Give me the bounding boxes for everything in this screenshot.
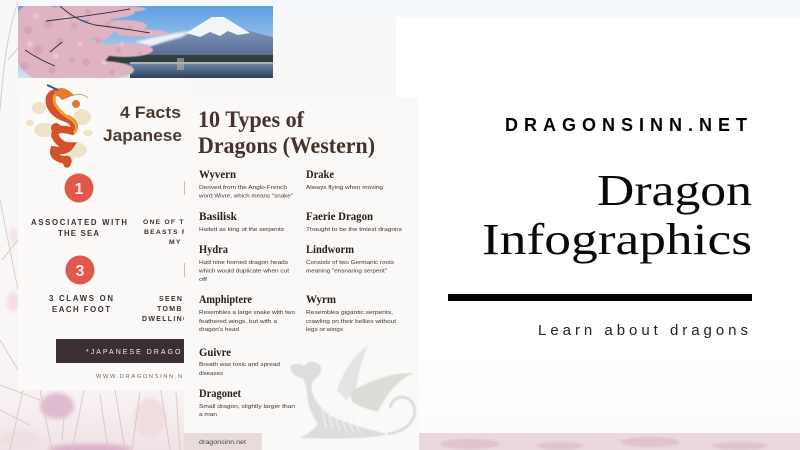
panel: Western dragons infographic — [184, 97, 419, 450]
floral strip at bottom right — [419, 433, 800, 450]
dragon type descriptions: Thought to be the tiniest dragons — [306, 227, 402, 233]
divider bar — [448, 294, 752, 301]
dragon type descriptions: dragon's head — [199, 327, 239, 333]
dragon type descriptions: word Wivre, which means "snake" — [198, 194, 293, 200]
main title: Infographics — [482, 215, 752, 264]
panel: Japanese dragons infographic — [14, 4, 273, 390]
dragon type descriptions: Derived from the Anglo-French — [199, 185, 287, 191]
fact 3: claws — [49, 256, 113, 314]
fact 4: tomb dwelling: DWELLING — [142, 316, 190, 323]
fact 1: associated with the sea: 1 — [75, 181, 84, 198]
dragon type descriptions: Breath was toxic and spread — [199, 362, 280, 368]
dragon type descriptions: Resembles gigantic serpents, — [306, 310, 393, 316]
dragon type descriptions: legs or wings — [306, 327, 343, 333]
main heading: Dragons (Western) — [198, 133, 375, 158]
dragon type descriptions: Always flying when moving — [306, 185, 383, 191]
fact 4: tomb dwelling — [142, 296, 190, 323]
banner — [56, 339, 185, 363]
fact 2: beasts of myth — [143, 219, 187, 246]
fact 4: tomb dwelling: SEEN — [159, 296, 183, 303]
heading: 4 Facts Japanese — [103, 104, 182, 145]
title card text — [448, 115, 752, 339]
fact 2: beasts of myth: BEASTS F — [144, 229, 187, 236]
main title — [482, 166, 752, 264]
site name: DRAGONSINN.NET — [505, 115, 747, 135]
dragon type descriptions: diseases — [199, 371, 223, 377]
heading: 4 Facts Japanese: Japanese — [103, 127, 182, 145]
footer tag: dragonsinn.net: dragonsinn.net — [199, 439, 246, 446]
dragon type descriptions — [198, 185, 402, 418]
footer tag: dragonsinn.net — [184, 433, 262, 450]
dragon type descriptions: Small dragon, slightly larger than — [199, 404, 295, 410]
website label: WWW.DRAGONSINN.N — [96, 374, 184, 380]
heading: 4 Facts Japanese: 4 Facts — [120, 104, 181, 122]
icon: Japanese dragon — [26, 85, 93, 164]
tagline: Learn about dragons — [538, 322, 748, 339]
dragon type descriptions: Hailed as king of the serpents — [199, 227, 284, 233]
dragon type descriptions: Resembles a large snake with two — [199, 310, 296, 316]
dragon type names — [199, 169, 374, 400]
fact 3: claws: EACH FOOT — [52, 305, 110, 314]
dragon type names: Drake — [306, 169, 334, 181]
clipped edges of hidden number circles — [184, 181, 185, 277]
dragon type names: Amphiptere — [199, 294, 252, 306]
dragon type names: Hydra — [199, 244, 228, 256]
dragon type names: Dragonet — [199, 388, 241, 400]
dragon type descriptions: which would duplicate when cut — [198, 268, 289, 274]
fact 1: associated with the sea: ASSOCIATED WITH — [31, 218, 127, 227]
dragon type names: Guivre — [199, 347, 231, 359]
fact 1: associated with the sea: THE SEA — [58, 229, 99, 238]
dragon type descriptions: meaning "ensnaring serpent" — [306, 268, 387, 274]
dragon type names: Wyvern — [199, 169, 237, 181]
panel: white title card — [396, 18, 800, 433]
fact 3: claws: 3 — [76, 263, 85, 280]
fact 2: beasts of myth: ONE OF T — [143, 219, 185, 226]
fact 4: tomb dwelling: TOMB — [157, 306, 183, 313]
dragon type names: Wyrm — [306, 294, 336, 306]
dragon type descriptions: off — [199, 277, 207, 283]
main heading: 10 Types of — [198, 107, 304, 132]
dragon type descriptions: Consists of two Germanic roots — [306, 260, 394, 266]
dragon type names: Lindworm — [306, 244, 354, 256]
dragon type descriptions: feathered wings, but with a — [199, 319, 278, 325]
photo: Mount Fuji and cherry blossoms — [14, 4, 273, 80]
banner: *JAPANESE DRAGO — [86, 349, 182, 356]
dragon type names: Faerie Dragon — [306, 211, 374, 223]
dragon type names: Basilisk — [199, 211, 238, 223]
fact 2: beasts of myth: MY — [169, 239, 182, 246]
dragon type descriptions: Had nine horned dragon heads — [199, 260, 288, 266]
dragon type descriptions: a man — [199, 412, 217, 418]
illustration: skeletal dragon — [290, 345, 415, 438]
fact 1: associated with the sea — [31, 174, 127, 238]
main title: Dragon — [597, 166, 752, 215]
fact 3: claws: 3 CLAWS ON — [49, 294, 113, 303]
main heading — [198, 107, 375, 158]
dragon type descriptions: crawling on their bellies without — [306, 319, 396, 325]
